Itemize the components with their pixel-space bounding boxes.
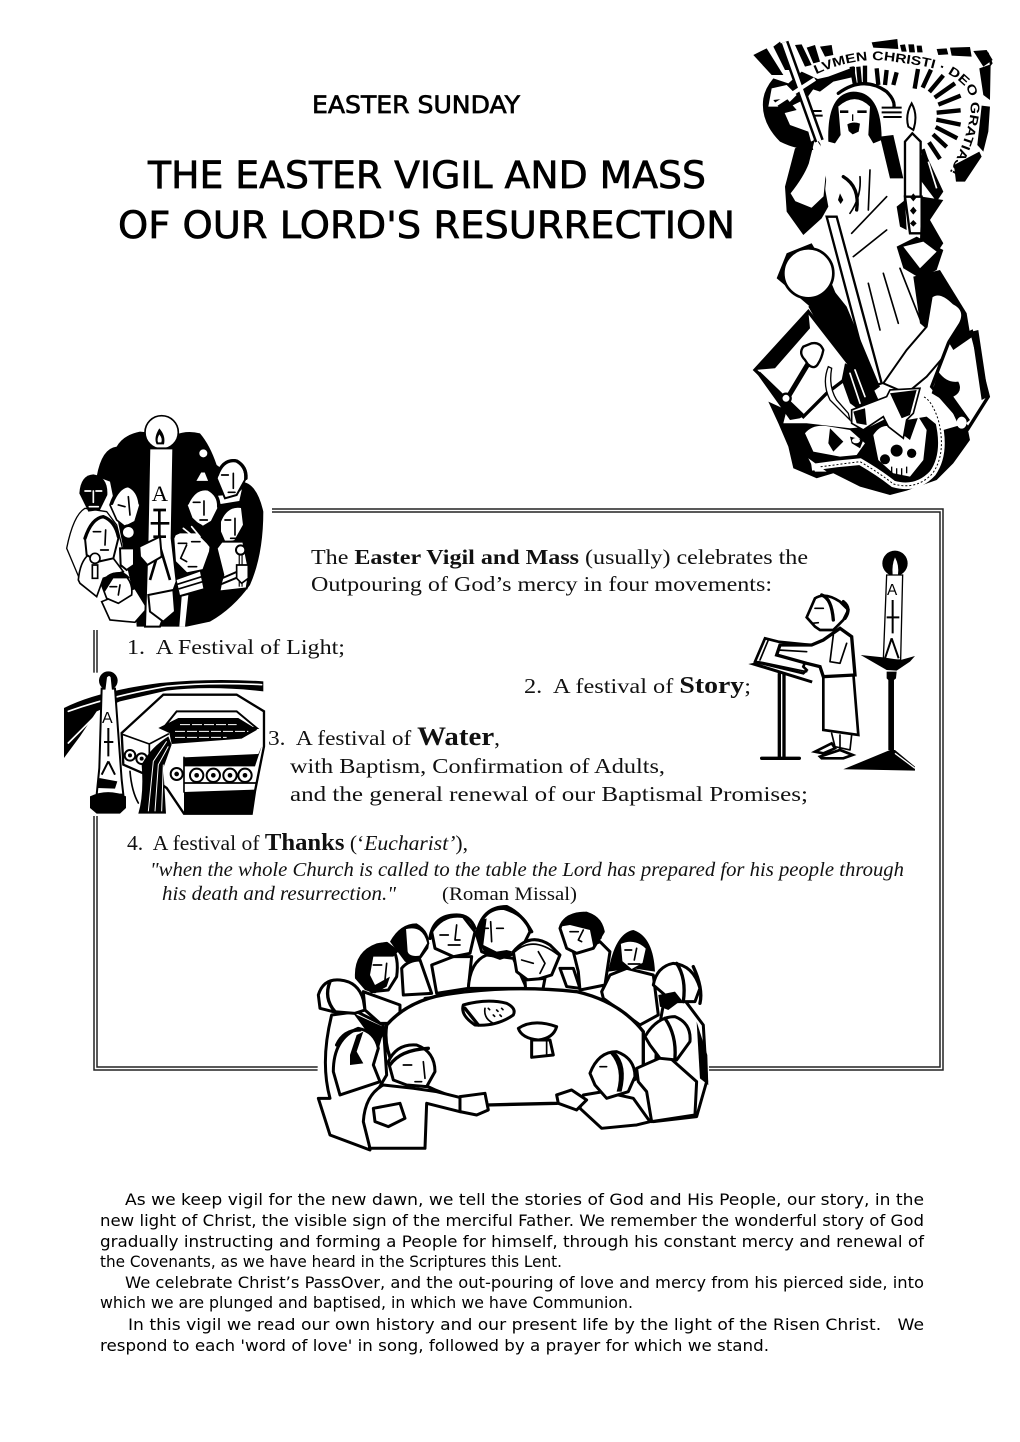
candle halo bbox=[145, 416, 178, 449]
black band top and bottom bbox=[184, 746, 262, 766]
icon: last supper table bbox=[317, 907, 710, 1152]
text: movement 4: his death and resurrection." bbox=[162, 884, 397, 905]
icon: reader at lectern and candle: A bbox=[887, 582, 898, 599]
black crescent behind cross bbox=[763, 72, 820, 150]
text: closing paragraph: the Covenants, as we have heard in the Scriptures this Lent. bbox=[100, 1252, 562, 1271]
text: movement 3 bbox=[268, 722, 808, 806]
text: closing paragraph: new light of Christ, the visible sign of the merciful Father. We remember the wonderful story of God bbox=[100, 1211, 924, 1230]
banner text bbox=[816, 60, 971, 188]
right seated man bbox=[637, 1055, 697, 1122]
candle lower bbox=[905, 197, 922, 233]
right banner edge bbox=[954, 64, 991, 182]
hand on shoulder bbox=[560, 968, 580, 988]
candle with halo bbox=[882, 551, 908, 576]
icon: baptismal font and paschal candle bbox=[63, 671, 264, 816]
candle bbox=[97, 689, 123, 795]
text: closing paragraph: which we are plunged and baptised, in which we have Communion. bbox=[100, 1293, 633, 1312]
plate and bread bbox=[463, 1001, 514, 1025]
third head bbox=[390, 923, 429, 963]
spirals bbox=[125, 750, 252, 782]
text: movement 4: "when the whole Church is called to the table the Lord has prepared for his people through bbox=[150, 860, 904, 881]
text: movement 3: and the general renewal of our Baptismal Promises; bbox=[290, 782, 808, 806]
front left man bbox=[363, 1085, 487, 1148]
left book bbox=[755, 312, 855, 417]
right body with candle bbox=[217, 542, 249, 592]
title: OF OUR LORD'S RESURRECTION bbox=[118, 203, 735, 247]
sixth bbox=[602, 968, 658, 1025]
left book key bbox=[801, 343, 823, 367]
cloud bbox=[913, 270, 970, 347]
text: introduction: The Easter Vigil and Mass (usually) celebrates the bbox=[311, 545, 808, 569]
hand on table bbox=[423, 997, 447, 1018]
hair, face, beard bbox=[828, 92, 882, 143]
title: THE EASTER VIGIL AND MASS bbox=[147, 153, 706, 197]
fifth head bbox=[573, 942, 610, 990]
band under text left bbox=[810, 67, 855, 92]
white backdrop over frame bbox=[317, 907, 710, 1152]
text: movement 3: with Baptism, Confirmation of Adults, bbox=[290, 754, 665, 778]
candle stand bbox=[861, 655, 915, 671]
font basin bbox=[122, 695, 264, 814]
left outer figure body bbox=[318, 1012, 387, 1150]
upper part: rays, banner, head: LVMEN CHRISTI · DEO GRATIAS! bbox=[814, 51, 980, 174]
text: introduction bbox=[311, 545, 808, 596]
icon: vigil congregation with paschal candle: A bbox=[152, 481, 169, 506]
child bbox=[102, 588, 147, 622]
second left body, bearded man bbox=[363, 992, 400, 1023]
text: closing paragraph: As we keep vigil for the new dawn, we tell the stories of God and His People, our story, in the bbox=[125, 1190, 924, 1209]
robe bbox=[820, 142, 943, 393]
text: closing paragraph: In this vigil we read our own history and our present life by the light of the Risen Christ. We bbox=[128, 1315, 924, 1334]
front left woman bbox=[333, 1028, 380, 1095]
text: movement 3: 3. A festival of Water , bbox=[268, 722, 500, 751]
cup bbox=[518, 1023, 557, 1040]
halo arc bbox=[838, 84, 894, 107]
dragon, skull and tail bbox=[768, 363, 970, 495]
right book bbox=[932, 332, 988, 428]
text: closing paragraph: gradually instructing and forming a People for himself, through his constant mercy and renewal of bbox=[100, 1232, 924, 1251]
black around arm bbox=[785, 138, 828, 235]
text: movement 1: 1. A Festival of Light; bbox=[127, 635, 345, 659]
text: introduction: Outpouring of God’s mercy in four movements: bbox=[311, 572, 772, 596]
text: movement 4: 4. A festival of Thanks (‘Eucharist’), bbox=[127, 830, 468, 856]
lectern bbox=[748, 663, 813, 683]
table bbox=[386, 989, 643, 1105]
text: movement 4 bbox=[127, 830, 904, 905]
text: movement 4: (Roman Missal) bbox=[442, 885, 577, 905]
globe bbox=[777, 243, 847, 320]
top banner rays bbox=[872, 39, 993, 67]
staff lower part bbox=[827, 217, 882, 387]
icon: baptismal font and paschal candle: A bbox=[102, 710, 113, 727]
candle body bbox=[145, 448, 177, 627]
icon: risen Christ woodcut bbox=[752, 39, 993, 495]
text: closing paragraph: We celebrate Christ’s PassOver, and the out-pouring of love and mercy from his pierced side, into bbox=[125, 1273, 924, 1292]
upper right candle bbox=[195, 472, 209, 482]
radial light rays bbox=[852, 66, 961, 172]
icon: vigil congregation with paschal candle bbox=[67, 416, 263, 627]
cross staff bbox=[784, 42, 819, 141]
water pour bbox=[138, 736, 172, 814]
beloved disciple bbox=[513, 940, 560, 982]
big black triangle bbox=[808, 290, 880, 403]
inner rim and water bbox=[163, 711, 257, 728]
front priest bbox=[175, 565, 222, 627]
small candles bbox=[120, 548, 134, 570]
figure head left bbox=[318, 980, 365, 1013]
upper part: rays, banner, head bbox=[753, 39, 993, 208]
right hand bbox=[897, 237, 943, 278]
front right man bbox=[580, 1092, 650, 1128]
reader bbox=[823, 673, 858, 735]
heading: Easter Sunday: EASTER SUNDAY bbox=[312, 91, 520, 119]
top left rays bbox=[753, 42, 833, 75]
water swoop band bbox=[64, 680, 263, 758]
dark background silhouette bbox=[97, 432, 263, 627]
text: closing paragraph bbox=[100, 1190, 924, 1355]
title bbox=[118, 153, 735, 247]
left figures bbox=[67, 508, 127, 580]
text: movement 2: 2. A festival of Story ; bbox=[524, 673, 751, 699]
text: closing paragraph: respond to each 'word of love' in song, followed by a prayer for which we stand. bbox=[100, 1336, 769, 1355]
Christ bbox=[468, 955, 527, 988]
hands on candle bbox=[139, 537, 162, 565]
robe folds bbox=[850, 170, 922, 330]
candle bbox=[905, 133, 921, 207]
fourth bbox=[432, 957, 472, 993]
icon: reader at lectern and candle bbox=[748, 551, 915, 771]
seventh right bbox=[653, 998, 707, 1122]
panel: double-line frame bbox=[94, 509, 943, 1070]
right figures bbox=[217, 487, 243, 505]
